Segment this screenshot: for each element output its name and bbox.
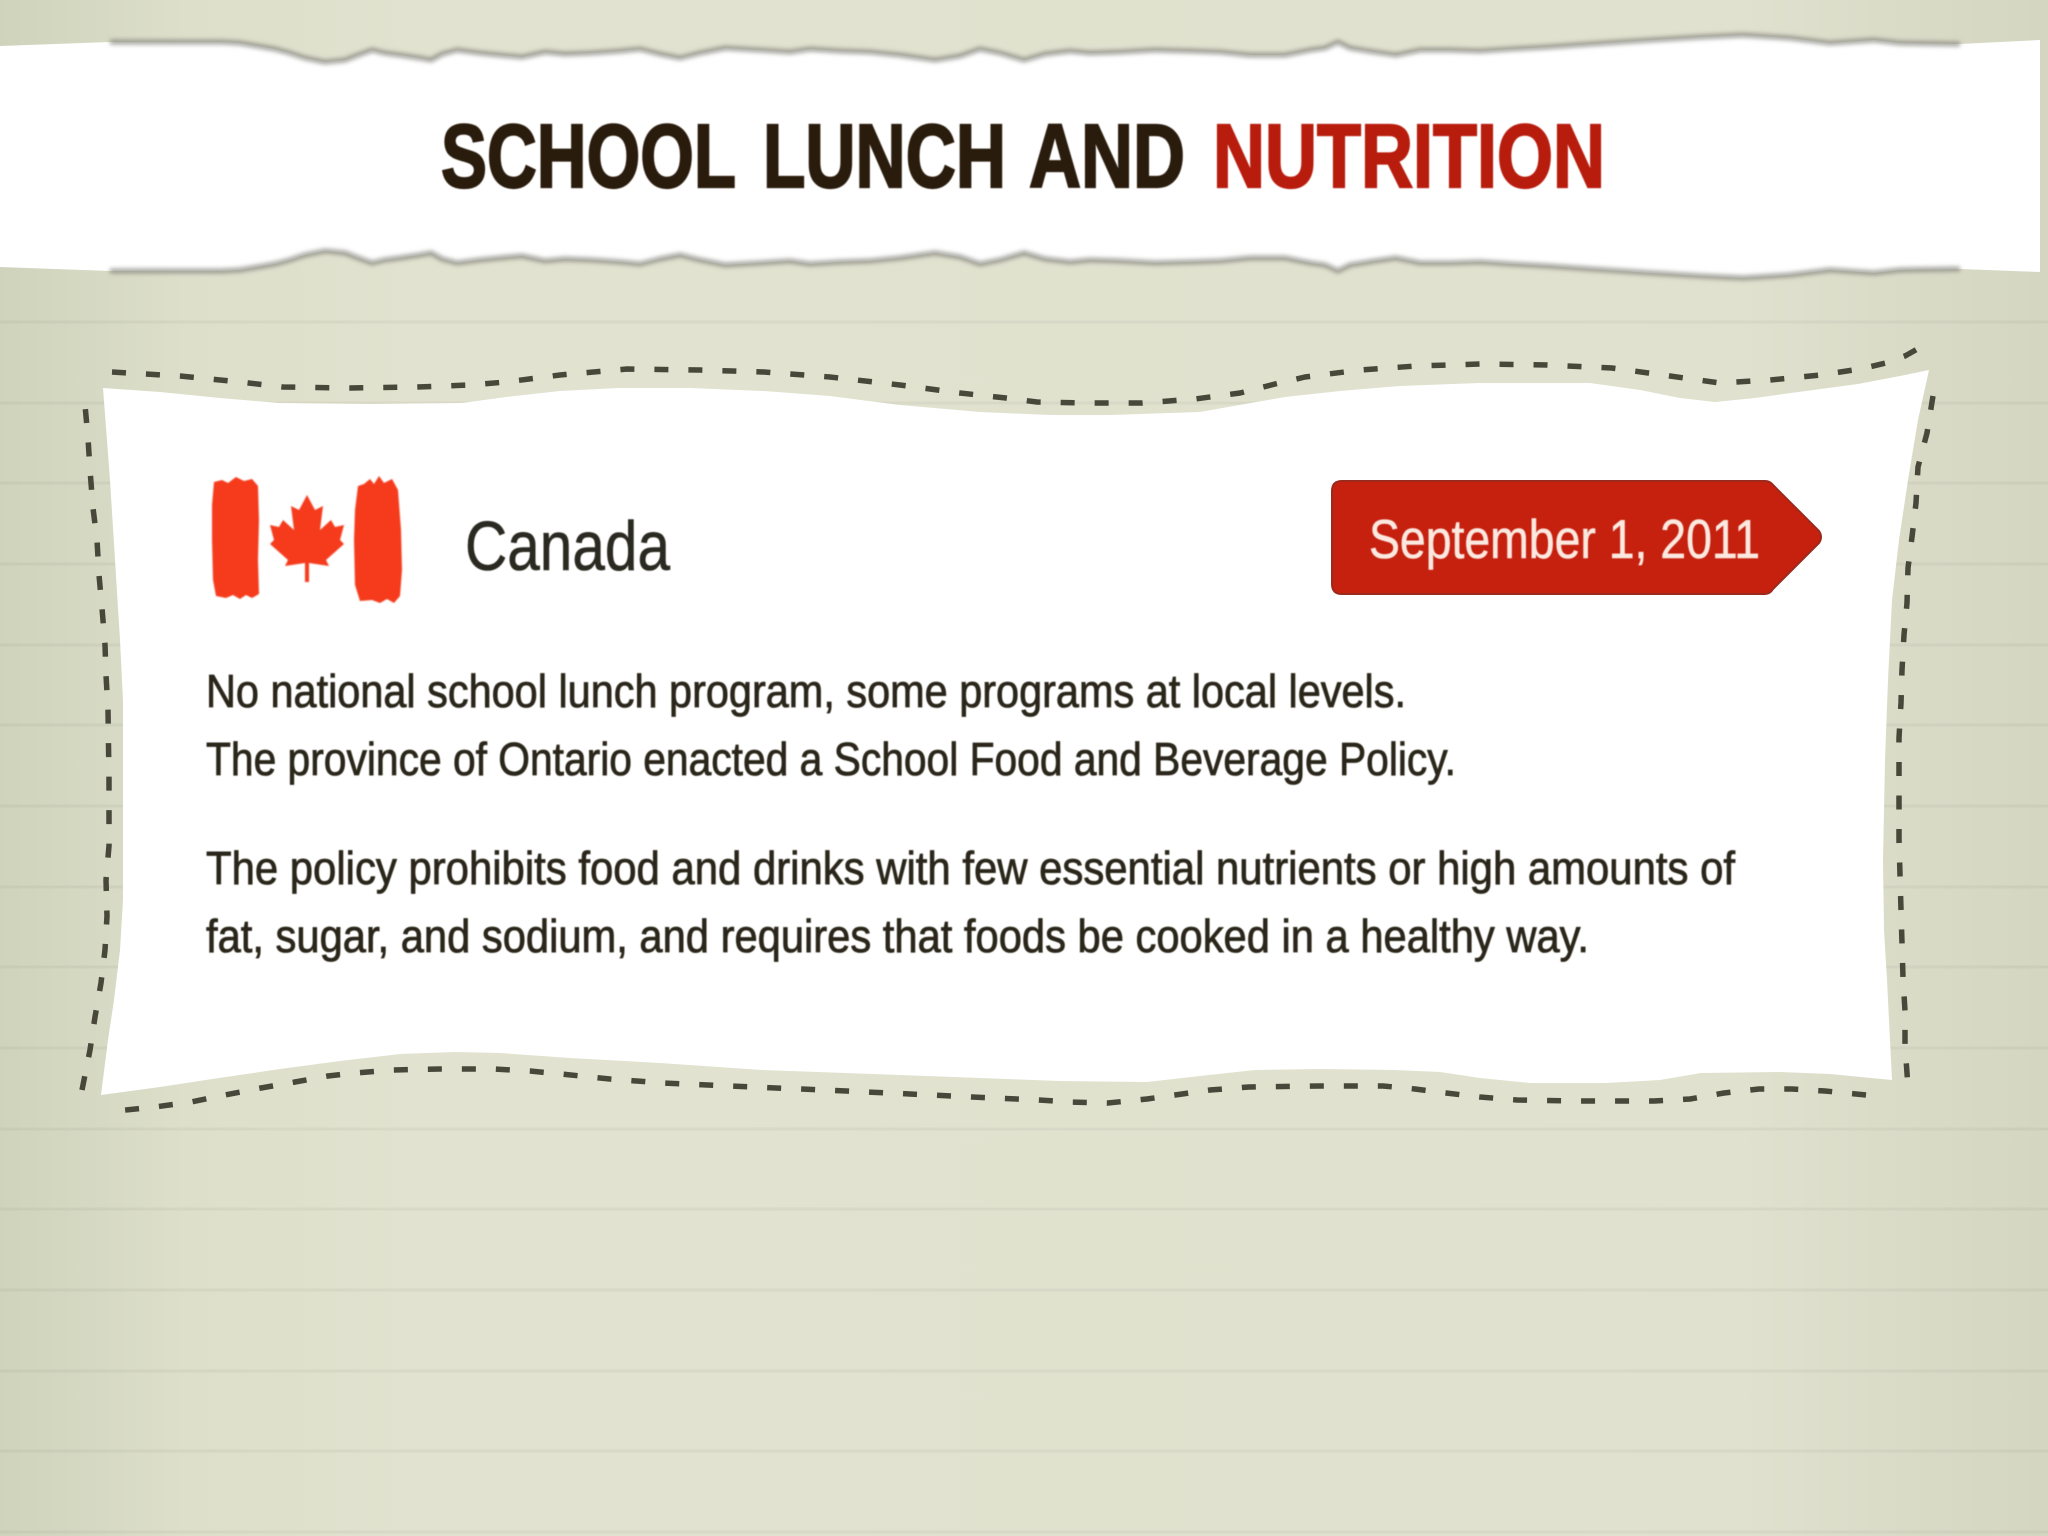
title: LUNCH	[763, 107, 1006, 207]
date badge	[1332, 481, 1821, 594]
country name: Canada	[465, 507, 670, 585]
text block: policy details	[206, 842, 1735, 962]
text block: program summary: The province of Ontario enacted a School Food and Beverage Policy.	[206, 733, 1456, 785]
title: SCHOOL	[441, 107, 736, 207]
text block: policy details: The policy prohibits food and drinks with few essential nutrients or high amounts of	[206, 842, 1735, 894]
title	[441, 107, 1605, 207]
stitched dashed border	[82, 347, 1933, 1111]
date badge: September 1, 2011	[1369, 508, 1760, 570]
text block: program summary	[206, 665, 1456, 785]
text block: policy details: fat, sugar, and sodium, and requires that foods be cooked in a healthy way.	[206, 910, 1589, 962]
torn paper title strip	[0, 35, 2040, 278]
text block: program summary: No national school lunch program, some programs at local levels.	[206, 665, 1406, 717]
panel: Canada card	[82, 347, 1933, 1111]
title: AND	[1029, 107, 1185, 207]
title: NUTRITION	[1213, 107, 1605, 207]
white wavy card	[101, 370, 1929, 1095]
icon: Canadian flag	[212, 476, 402, 603]
